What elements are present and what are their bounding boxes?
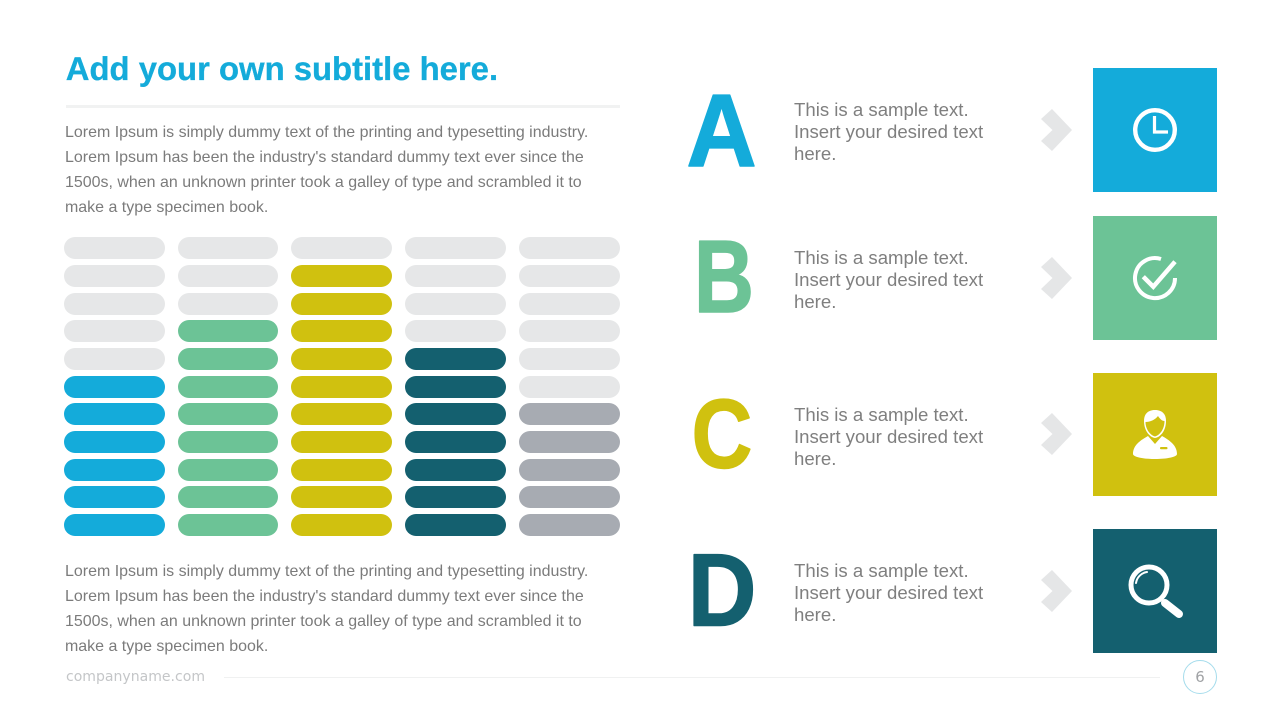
row D text: Insert your desired text: [794, 582, 983, 603]
arrow C: [1041, 413, 1072, 455]
text block: bottom paragraph: make a type specimen book.: [65, 638, 268, 655]
panel: person icon: [1093, 373, 1217, 496]
row D text: here.: [794, 604, 836, 625]
row C text: This is a sample text.: [794, 404, 969, 424]
text block: bottom paragraph: [65, 563, 588, 655]
text block: bottom paragraph: Lorem Ipsum is simply dummy text of the printing and typesetting industry.: [65, 563, 588, 580]
arrow B: [1041, 257, 1072, 299]
row A text: Insert your desired text: [794, 121, 983, 142]
panel: clock icon: [1093, 68, 1217, 192]
icon: check circle: [1132, 256, 1177, 300]
icon: magnifying glass: [1128, 564, 1183, 618]
row A text: This is a sample text.: [794, 98, 969, 120]
arrow D: [1041, 570, 1072, 612]
footer line: [224, 677, 1160, 678]
panel: check icon: [1093, 216, 1217, 340]
column 3: yellow: [291, 237, 392, 536]
text block: top paragraph: Lorem Ipsum is simply dummy text of the printing and typesetting industry.: [65, 124, 588, 141]
text block: bottom paragraph: Lorem Ipsum has been the industry's standard dummy text ever since the: [65, 588, 584, 605]
column 1: blue: [64, 237, 165, 536]
column 2: green: [178, 237, 278, 536]
column 5: grey: [519, 237, 620, 536]
row C text: Insert your desired text: [794, 426, 983, 447]
row D text: [794, 560, 984, 625]
title divider: [66, 105, 620, 108]
page number: [1183, 660, 1217, 694]
row D text: This is a sample text.: [794, 560, 969, 580]
text block: bottom paragraph: 1500s, when an unknown printer took a galley of type and scrambled it to: [65, 613, 582, 630]
page number: 6: [1195, 668, 1205, 686]
row A text: here.: [794, 143, 836, 164]
column 4: dark teal: [405, 237, 506, 536]
row B text: This is a sample text.: [794, 246, 969, 268]
arrow A: [1041, 109, 1072, 151]
row B text: Insert your desired text: [794, 269, 983, 290]
row C text: here.: [794, 448, 836, 469]
text block: top paragraph: 1500s, when an unknown printer took a galley of type and scrambled it to: [65, 174, 582, 191]
icon: person: [1133, 410, 1177, 459]
icon: clock: [1133, 108, 1177, 152]
row A text: [794, 98, 984, 164]
panel: magnifier icon: [1093, 529, 1217, 653]
text block: top paragraph: make a type specimen book.: [65, 199, 268, 216]
row B text: here.: [794, 291, 836, 312]
row B text: [794, 246, 984, 312]
row C text: [794, 404, 984, 469]
pill bar chart: [64, 237, 620, 536]
text block: top paragraph: Lorem Ipsum has been the industry's standard dummy text ever since the: [65, 149, 584, 166]
text block: top paragraph: [65, 124, 588, 216]
footer: company name: companyname.com: [66, 669, 205, 685]
title: Add your own subtitle here.: [66, 50, 498, 87]
